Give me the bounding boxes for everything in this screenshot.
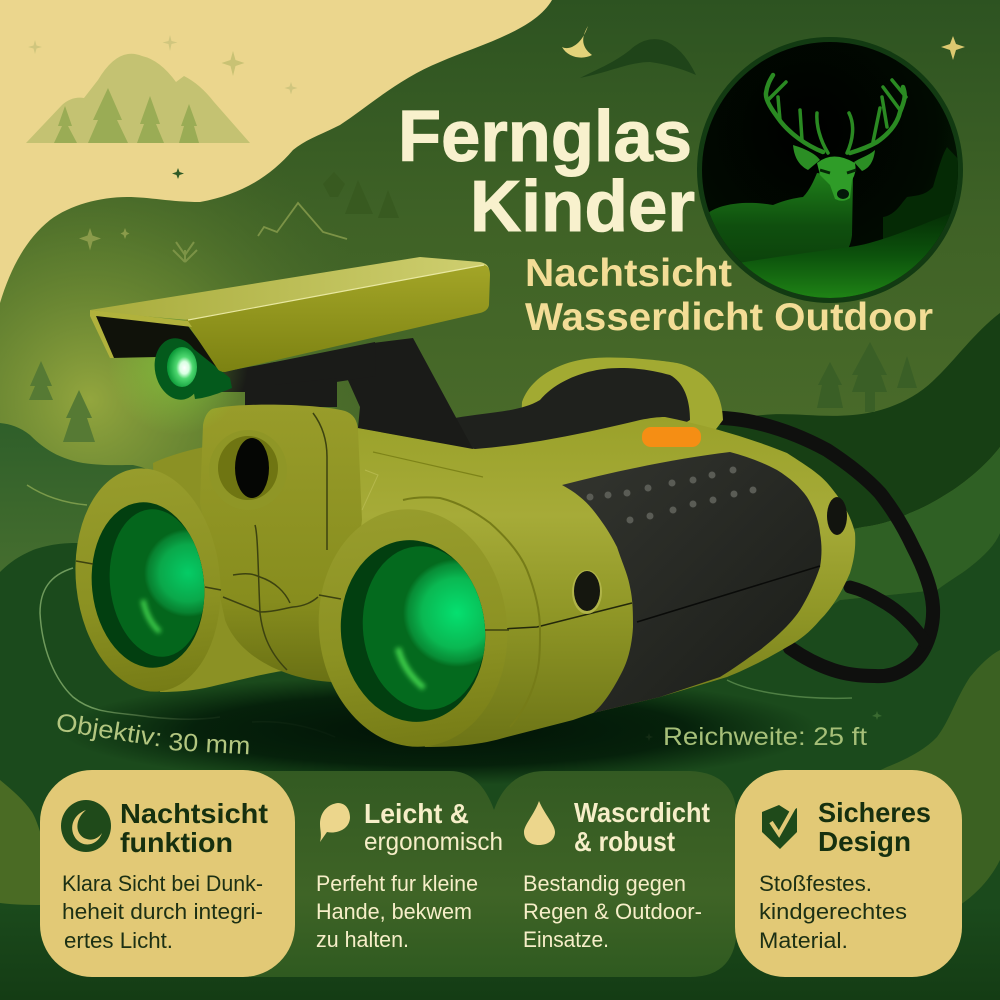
card: Wasserdicht und robust: Wascrdicht [574,797,710,828]
icon: water drop [524,801,555,845]
card: Leicht und ergonomisch [250,771,503,977]
card: Sicheres Design [735,770,962,977]
left barrel back [153,447,290,692]
sensor window [209,430,287,510]
card: Leicht und ergonomisch: Leicht & [364,798,469,829]
title: Kinder [470,167,695,247]
body seams and ridges [362,452,820,727]
ground contour lines [40,568,220,719]
side buttons [572,497,847,614]
decorative mountains and trees, top left [26,54,250,143]
card: Leicht und ergonomisch: ergonomisch [364,828,503,856]
title: Fernglas [398,97,692,177]
card: Nachtsicht funktion: ertes Licht. [64,928,173,953]
title [398,97,695,247]
right objective lens [318,510,509,747]
card: Wasserdicht und robust: Bestandig gegen [523,871,686,896]
bottom left hill [0,780,50,905]
LED glow [108,295,248,435]
subtitle: Wasserdicht Outdoor [525,296,933,339]
card: Leicht und ergonomisch: zu halten. [316,927,409,952]
label: objective size: Objektiv: [54,708,164,753]
deer body [709,173,853,262]
binoculars product [65,257,933,756]
black grip panel [562,452,822,713]
card: Wasserdicht und robust: Einsatze. [523,927,609,952]
LED lamp [149,334,232,404]
card: Nachtsicht funktion: Nachtsicht [120,798,268,829]
bottom right hill [850,650,1000,905]
card: Leicht und ergonomisch: Hande, bekwem [316,899,472,924]
card: Nachtsicht funktion: heheit durch integri- [62,899,263,924]
distant mountain silhouette [580,39,696,78]
icon: crescent moon [562,26,592,58]
card: Nachtsicht funktion: funktion [120,827,233,858]
sun visor [90,257,490,372]
dark lower ground [0,533,1000,1000]
card: Nachtsicht funktion [40,770,295,977]
card: Wasserdicht und robust: Regen & Outdoor- [523,899,702,924]
right hills [700,313,1000,560]
left hills [0,423,200,640]
orange button [642,427,701,447]
card: Nachtsicht funktion: Klara Sicht bei Dunk- [62,871,263,896]
label: range: Reichweite: 25 ft [663,723,867,751]
icon: leaf [320,803,350,842]
treeline [883,147,958,239]
faint trees and mountain outline [29,172,917,442]
card: Wasserdicht und robust [494,771,737,977]
deer head [793,145,875,201]
subtitle: Nachtsicht [525,252,732,295]
strap [693,417,933,676]
card: Leicht und ergonomisch: Perfeht fur kleine [316,871,478,896]
cream wave top left [0,0,552,303]
left objective lens [75,468,222,692]
card: Wasserdicht und robust: & robust [574,826,675,857]
icon: moon [61,800,111,852]
grip dots [586,466,756,524]
visor arm [222,338,473,449]
sparkle stars [28,35,965,741]
card: Sicheres Design: Design [818,826,911,857]
visor underside [93,315,222,372]
card: Sicheres Design: kindgerechtes [759,899,907,924]
card: Sicheres Design: Sicheres [818,797,931,828]
night vision deer medallion [697,37,963,310]
icon: shield check [762,802,797,849]
foreground grass [742,217,949,298]
antlers [766,75,906,153]
card: Sicheres Design: Material. [759,928,848,953]
label: objective size [54,708,251,760]
rear eyepiece hump [455,357,723,450]
main barrel body [340,417,855,747]
subtitle [525,252,933,339]
ground shadow under binoculars [60,675,820,785]
card: Sicheres Design: Stoßfestes. [759,871,872,896]
feature cards [40,770,962,977]
centre bridge block [200,405,362,682]
label: objective size: 30 mm [168,728,251,760]
